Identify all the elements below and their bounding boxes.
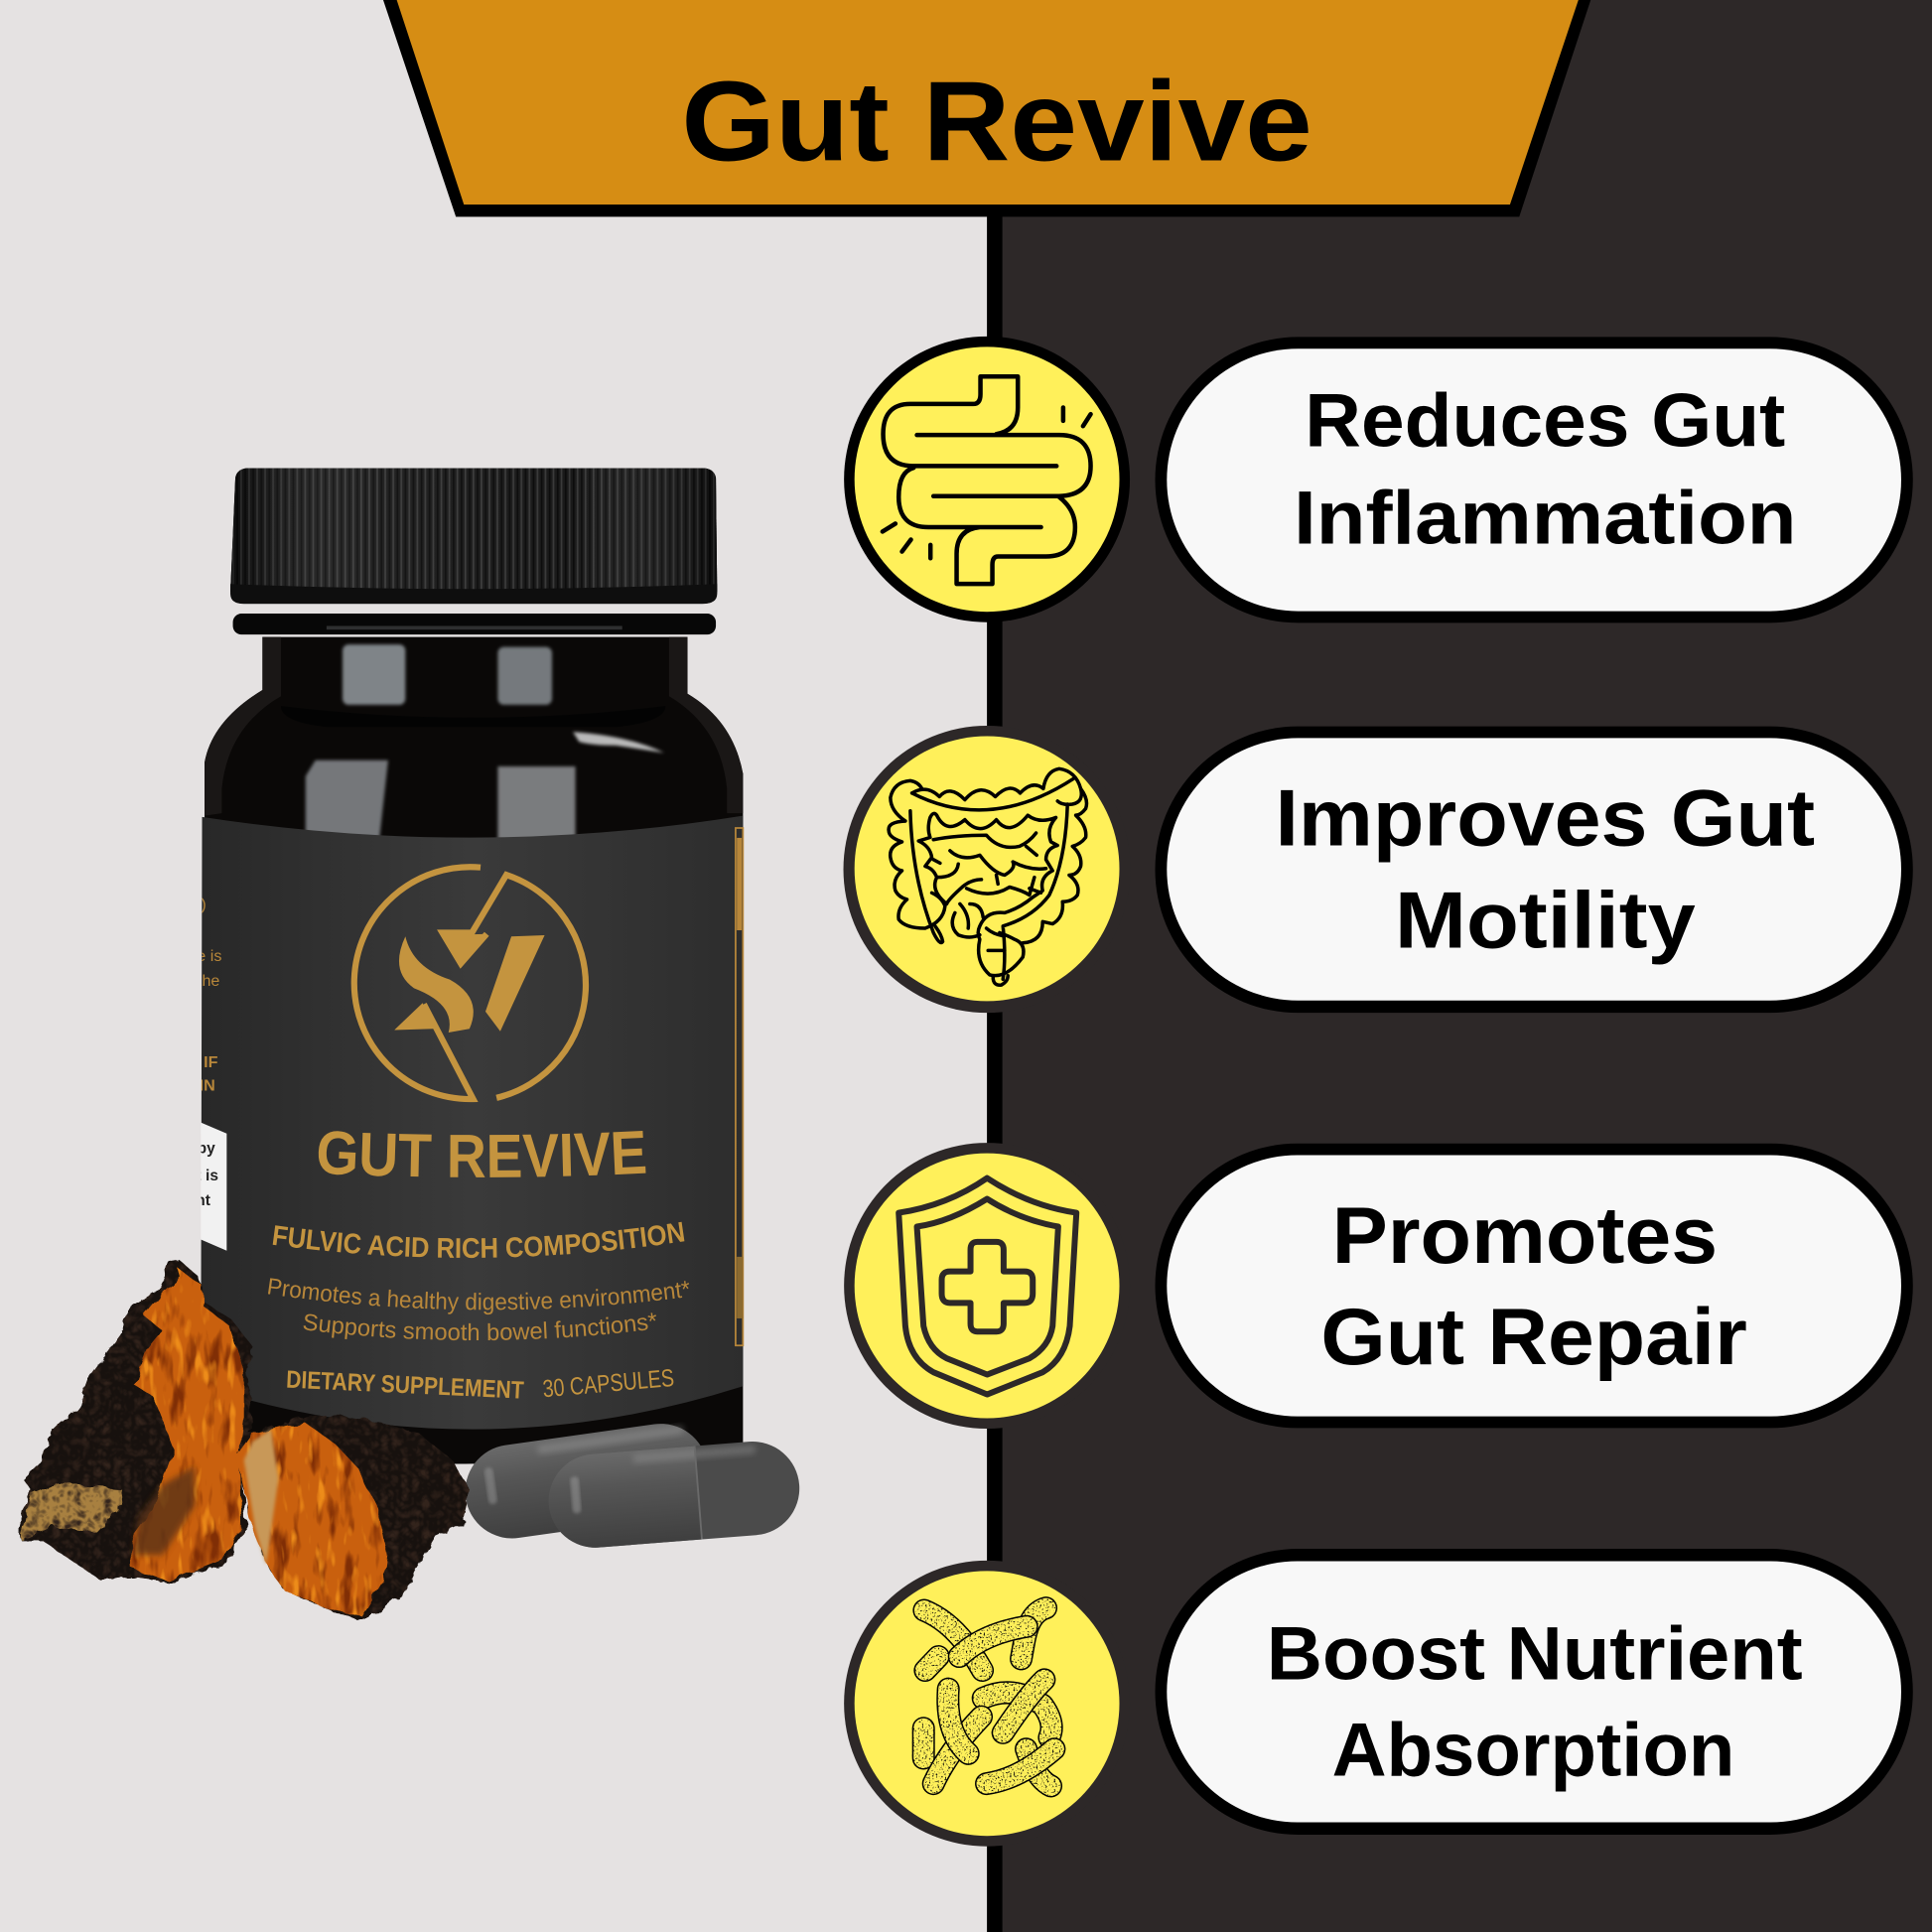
side label text, left: here is: [174, 947, 221, 965]
capsule count: 30 CAPSULES: [541, 1365, 675, 1403]
pill text: Improves Gut: [1276, 773, 1815, 863]
pill text: [1267, 1612, 1803, 1792]
white side sticker: ent: [188, 1192, 210, 1209]
white side sticker: [201, 1122, 226, 1251]
bottle collar: [233, 614, 716, 634]
pill text: Reduces Gut: [1305, 378, 1785, 463]
product subtitle: FULVIC ACID RICH COMPOSITION: [272, 1221, 685, 1259]
icon: shield with cross: [844, 1143, 1130, 1429]
side label text, left: RE IN: [173, 1076, 215, 1094]
pill text: [1320, 1191, 1747, 1382]
background: left light panel: [0, 0, 988, 1932]
bottle cap: [230, 469, 717, 604]
bottle glass body: [205, 637, 743, 1465]
benefit 4: [844, 1549, 1913, 1847]
benefit line 2: Supports smooth bowel functions*: [304, 1312, 656, 1340]
side label text, left: [201, 897, 221, 1090]
bottle label: [201, 816, 745, 1430]
side label text, left: USE IF: [167, 1053, 218, 1071]
back capsule: [460, 1418, 714, 1545]
icon: gut bacteria: [844, 1561, 1130, 1847]
benefit line 1: Promotes a healthy digestive environment*: [268, 1278, 689, 1314]
pill: boost nutrient absorption: [1156, 1549, 1913, 1835]
dietary supplement text: DIETARY SUPPLEMENT: [286, 1366, 524, 1405]
pill text: Promotes: [1332, 1191, 1718, 1281]
benefit 1: [844, 337, 1913, 622]
capsules: [460, 1418, 803, 1551]
pill text: Absorption: [1332, 1708, 1734, 1792]
pill: reduces gut inflammation: [1156, 337, 1913, 622]
pill: promotes gut repair: [1156, 1144, 1913, 1428]
center divider: [987, 209, 1003, 1932]
product bottle: [201, 469, 745, 1463]
brand logo: [354, 867, 586, 1099]
pill text: [1276, 773, 1815, 965]
pill text: Gut Repair: [1320, 1293, 1747, 1382]
front capsule: [545, 1438, 803, 1551]
icon: large intestine: [844, 726, 1131, 1013]
background: right dark panel: [1002, 0, 1932, 1932]
side label text, left: eth): [179, 896, 207, 913]
chaga mushroom chunks: [21, 1259, 471, 1620]
left chunk: [21, 1259, 252, 1584]
white side sticker: duct is: [169, 1168, 218, 1184]
product name: GUT REVIVE: [318, 1131, 645, 1177]
pill text: [1294, 378, 1796, 560]
pill text: Inflammation: [1294, 476, 1796, 560]
side label text, left: es the: [176, 972, 219, 990]
benefit 2: [844, 726, 1913, 1013]
white side sticker: ed by: [175, 1141, 215, 1158]
right chunk: [236, 1415, 471, 1620]
icon: small intestine: [844, 337, 1130, 622]
benefit 3: [844, 1143, 1913, 1429]
title banner: [383, 0, 1590, 216]
side label strip, right: [736, 828, 743, 1345]
pill text: Motility: [1395, 876, 1696, 965]
pill text: Boost Nutrient: [1267, 1612, 1803, 1697]
pill: improves gut motility: [1156, 727, 1913, 1013]
title text: Gut Revive: [681, 59, 1312, 185]
